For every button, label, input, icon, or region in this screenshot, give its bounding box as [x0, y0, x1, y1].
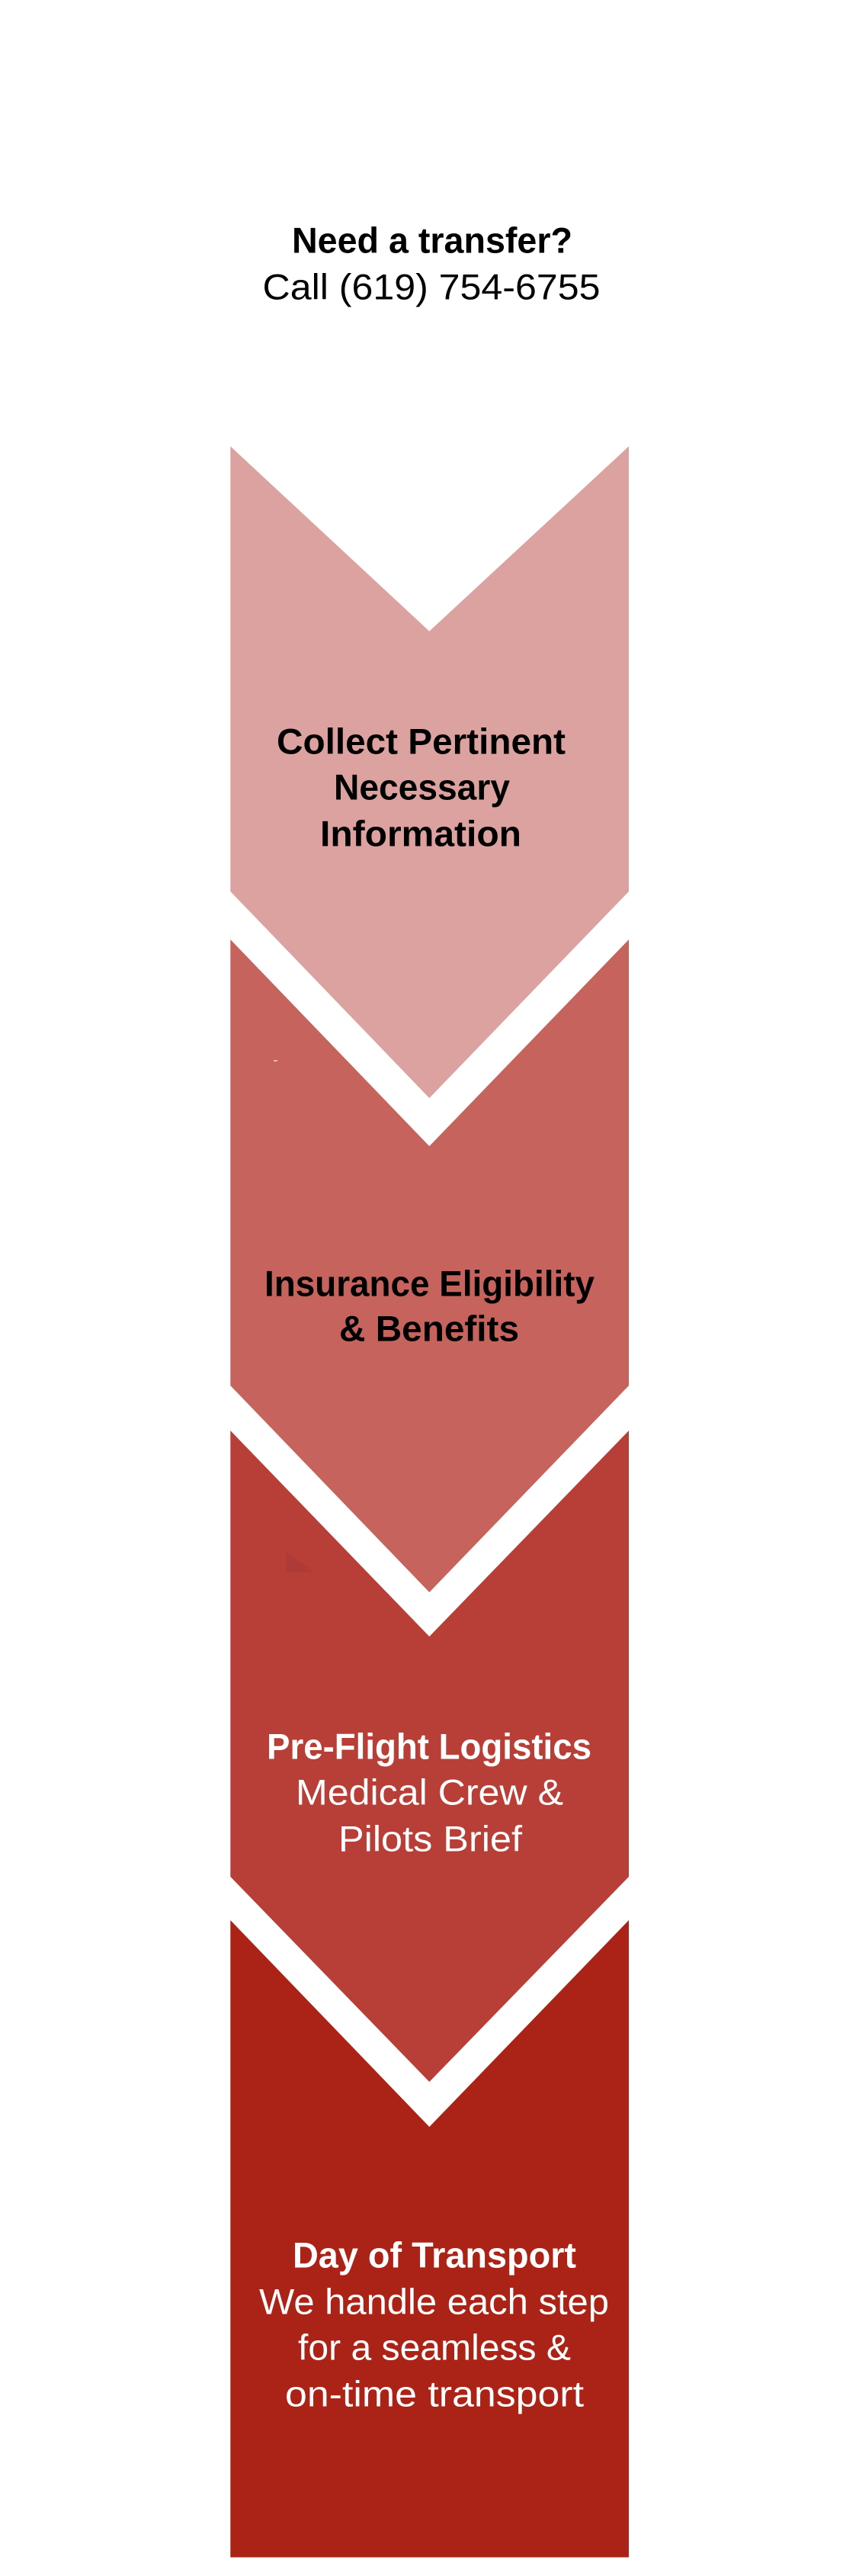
panel: step 3 chevron — [230, 1431, 629, 2082]
panel: step 2 chevron — [230, 940, 629, 1592]
text: step 4 label — [259, 2234, 609, 2414]
text: step 3 label: Pilots Brief — [338, 1818, 523, 1859]
text: step 4 label: on-time transport — [285, 2373, 584, 2414]
text: step 2 label: & Benefits — [339, 1309, 519, 1348]
text: step 3 label: Pre-Flight Logistics — [267, 1726, 591, 1766]
heading: call to action: Call (619) 754-6755 — [262, 267, 601, 307]
text: step 2 label — [264, 1263, 595, 1348]
text: step 4 label: Day of Transport — [293, 2234, 576, 2276]
text: step 3 label — [267, 1726, 591, 1859]
heading: call to action — [262, 220, 601, 307]
heading: call to action: Need a transfer? — [292, 220, 572, 261]
panel: step 4 block — [230, 1920, 629, 2558]
text: step 1 label: Necessary — [334, 767, 510, 807]
text: step 1 label: Information — [320, 813, 521, 854]
text: step 2 label: Insurance Eligibility — [264, 1263, 595, 1304]
text: step 4 label: for a seamless & — [298, 2327, 571, 2367]
text: step 1 label: Collect Pertinent — [277, 721, 566, 761]
text: step 3 label: Medical Crew & — [296, 1772, 563, 1812]
panel: step 1 chevron — [230, 446, 629, 1098]
text: step 1 label — [277, 721, 566, 854]
text: step 4 label: We handle each step — [259, 2282, 609, 2321]
